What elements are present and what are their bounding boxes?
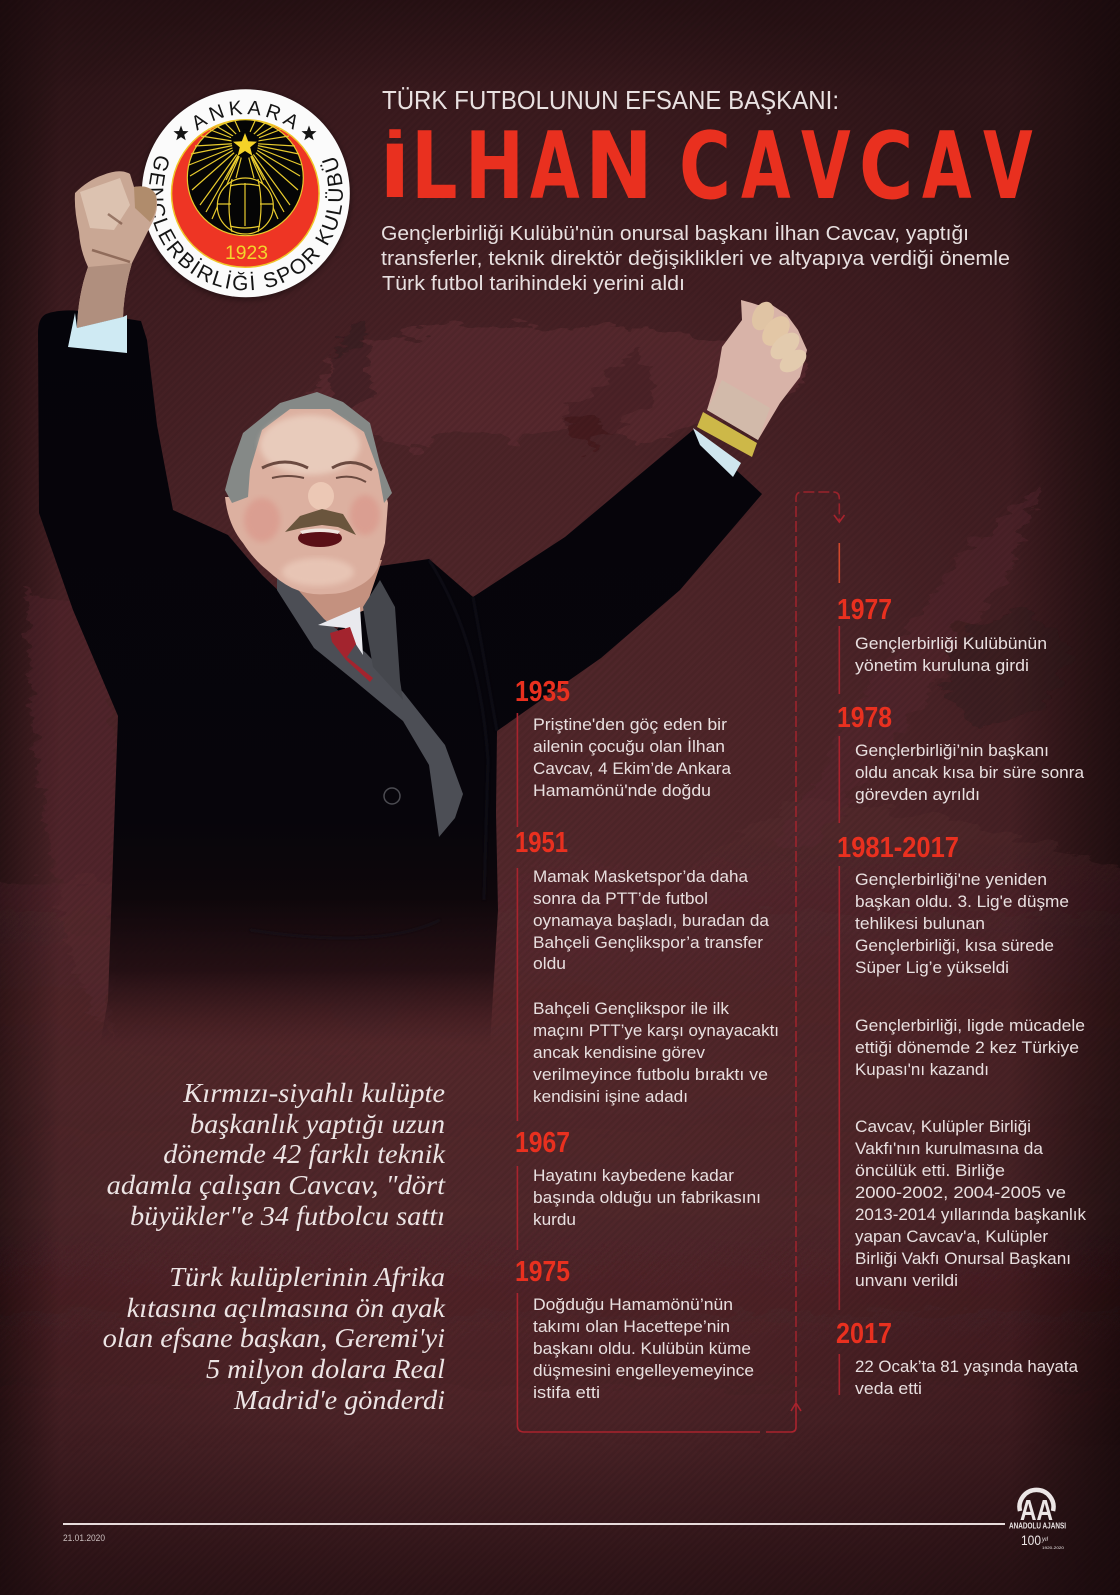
heading: kicker: TÜRK FUTBOLUNUN EFSANE BAŞKANI: (382, 85, 839, 115)
italic quote block 2: kıtasına açılmasına ön ayak (127, 1293, 446, 1323)
timeline entry: 1935: ailenin çocuğu olan İlhan (533, 737, 725, 756)
timeline entry: 1977: yönetim kuruluna girdi (855, 656, 1029, 675)
Anadolu Ajansı logo: 1920-2020 (1042, 1546, 1064, 1550)
timeline entry: 1978 (837, 702, 1085, 804)
timeline entry: 1975: istifa etti (533, 1383, 600, 1402)
timeline entry: 1951: kendisini işine adadı (533, 1087, 688, 1106)
photo: left shirt cuff (68, 313, 127, 353)
main title: A (741, 112, 790, 220)
timeline entry: 1978: görevden ayrıldı (855, 785, 980, 804)
timeline entry: 1981-2017: Gençlerbirliği, ligde mücadele (855, 1016, 1085, 1035)
timeline entry: 1951: Bahçeli Gençlikspor’a transfer (533, 933, 763, 952)
photo: neck (262, 560, 382, 628)
photo: right shirt cuff (693, 428, 741, 477)
italic quote block 2: 5 milyon dolara Real (206, 1354, 445, 1384)
main title: N (584, 112, 652, 220)
main title (379, 112, 1032, 220)
timeline entry: 1978: Gençlerbirliği’nin başkanı (855, 741, 1049, 760)
timeline entry: 1981-2017: ettiği dönemde 2 kez Türkiye (855, 1038, 1079, 1057)
intro paragraph: Türk futbol tarihindeki yerini aldı (382, 273, 685, 295)
footer date: 21.01.2020 (63, 1533, 105, 1544)
timeline entry: 1981-2017: Vakfı'nın kurulmasına da (855, 1139, 1044, 1158)
timeline entry: 1951: sonra da PTT’de futbol (533, 889, 708, 908)
intro paragraph: Gençlerbirliği Kulübü'nün onursal başkanı İlhan Cavcav, yaptığı (381, 222, 969, 245)
italic quote block 2: Madrid'e gönderdi (233, 1385, 445, 1415)
photo: Ilhan Cavcav with raised arms (38, 171, 810, 1045)
timeline entry: 1981-2017: yapan Cavcav'a, Kulüpler (855, 1227, 1048, 1246)
timeline entry: 1951: oynamaya başladı, buradan da (533, 911, 770, 930)
Anadolu Ajansı logo: 100 (1021, 1532, 1041, 1548)
timeline entry: 1981-2017: Süper Lig’e yükseldi (855, 958, 1009, 977)
photo: mouth (298, 529, 342, 547)
timeline entry: 1981-2017: başkan oldu. 3. Lig'e düşme (855, 892, 1069, 911)
timeline entry: 1935: Priştine'den göç eden bir (533, 715, 727, 734)
timeline entry: 2017: 2017 (836, 1318, 892, 1350)
timeline entry: 2017 (836, 1318, 1079, 1398)
timeline entry: 1975: düşmesini engelleyemeyince (533, 1361, 754, 1380)
timeline connector lines (517, 492, 844, 1432)
Anadolu Ajansı logo (1009, 1490, 1066, 1550)
photo: right fist (707, 298, 810, 440)
italic quote block 1: adamla çalışan Cavcav, "dört (107, 1170, 447, 1200)
timeline entry: 1967: 1967 (515, 1127, 570, 1159)
photo: coat (38, 310, 762, 1045)
italic quote block 2 (103, 1262, 446, 1415)
timeline entry: 1977 (837, 594, 1047, 675)
timeline entry: 1981-2017: Gençlerbirliği'ne yeniden (855, 870, 1047, 889)
brush strokes texture (0, 322, 1120, 1500)
timeline entry: 1981-2017: 2000-2002, 2004-2005 ve (855, 1183, 1066, 1202)
timeline entry: 1935 (515, 676, 732, 800)
timeline entry: 1975: 1975 (515, 1256, 570, 1288)
logo: top arc text: ANKARA (194, 100, 296, 131)
timeline entry: 1981-2017 (837, 832, 1086, 1290)
Anadolu Ajansı logo: AA (1020, 1495, 1053, 1527)
timeline entry: 1951: Mamak Masketspor’da daha (533, 867, 749, 886)
timeline entry: 1981-2017: 1981-2017 (837, 832, 959, 864)
Anadolu Ajansı logo: ANADOLU AJANSI (1009, 1522, 1066, 1530)
main title: C (859, 112, 913, 220)
timeline entry: 2017: 22 Ocak’ta 81 yaşında hayata (855, 1357, 1079, 1376)
timeline entry: 1951: maçını PTT’ye karşı oynayacaktı (533, 1021, 779, 1040)
main title: V (801, 112, 850, 220)
timeline entry: 1967: Hayatını kaybedene kadar (533, 1166, 734, 1185)
main title: V (983, 112, 1032, 220)
main title: L (411, 112, 458, 220)
photo: left fist (75, 171, 157, 328)
timeline entry: 1951: Bahçeli Gençlikspor ile ilk (533, 999, 730, 1018)
photo: gold watch (697, 412, 757, 457)
Anadolu Ajansı logo: yıl (1041, 1537, 1049, 1543)
photo: moustache (285, 509, 356, 535)
timeline entry: 1951: ancak kendisine görev (533, 1043, 705, 1062)
main title: A (530, 112, 579, 220)
timeline entry: 1951: 1951 (515, 827, 568, 859)
italic quote block 1: başkanlık yaptığı uzun (190, 1109, 445, 1139)
timeline entry: 1978: oldu ancak kısa bir süre sonra (855, 763, 1085, 782)
timeline entry: 1981-2017: 2013-2014 yıllarında başkanlık (855, 1205, 1086, 1224)
timeline entry: 1981-2017: öncülük etti. Birliğe (855, 1161, 1005, 1180)
timeline entry: 1977: 1977 (837, 594, 892, 626)
timeline entry: 1975 (515, 1256, 754, 1402)
logo: Gençlerbirliği badge (140, 89, 352, 301)
main title: İ (379, 130, 411, 215)
logo star (231, 129, 259, 160)
timeline entry: 1981-2017: tehlikesi bulunan (855, 914, 985, 933)
photo: coat button (384, 788, 400, 804)
photo: head (225, 392, 392, 594)
timeline entry: 1967: kurdu (533, 1210, 576, 1229)
photo: scarf (277, 566, 463, 837)
timeline entry: 1935: 1935 (515, 676, 570, 708)
timeline entry: 1981-2017: unvanı verildi (855, 1271, 958, 1290)
main title: A (922, 112, 971, 220)
italic quote block 2: Türk kulüplerinin Afrika (169, 1262, 445, 1292)
intro paragraph (381, 222, 1010, 295)
intro paragraph: transferler, teknik direktör değişiklikleri ve altyapıya verdiği önemle (381, 248, 1010, 270)
footer rule (63, 1523, 1005, 1525)
timeline entry: 1978: 1978 (837, 702, 892, 734)
timeline entry: 1951: oldu (533, 954, 566, 973)
italic quote block 1 (107, 1078, 447, 1231)
timeline entry: 1967 (515, 1127, 761, 1229)
timeline entry: 1935: Cavcav, 4 Ekim’de Ankara (533, 759, 732, 778)
italic quote block 1: dönemde 42 farklı teknik (163, 1139, 446, 1169)
logo football (217, 178, 273, 234)
timeline entry: 2017: veda etti (855, 1379, 922, 1398)
logo stars (174, 126, 316, 140)
italic quote block 2: olan efsane başkan, Geremi'yi (103, 1323, 445, 1353)
logo year: 1923 (225, 243, 268, 264)
logo: bottom arc text: GENÇLERBİRLİĞİ SPOR KULÜBÜ (149, 156, 343, 290)
italic quote block 1: Kırmızı-siyahlı kulüpte (182, 1078, 445, 1108)
main title: H (464, 112, 523, 220)
timeline entry: 1975: takımı olan Hacettepe’nin (533, 1317, 730, 1336)
timeline entry: 1981-2017: Gençlerbirliği, kısa sürede (855, 936, 1054, 955)
timeline entry: 1977: Gençlerbirliği Kulübünün (855, 634, 1047, 653)
timeline entry: 1981-2017: Cavcav, Kulüpler Birliği (855, 1117, 1031, 1136)
timeline entry: 1975: başkanı oldu. Kulübün küme (533, 1339, 751, 1358)
timeline entry: 1975: Doğduğu Hamamönü’nün (533, 1295, 733, 1314)
timeline entry: 1981-2017: Birliği Vakfı Onursal Başkanı (855, 1249, 1071, 1268)
logo rays (189, 121, 301, 219)
timeline entry: 1981-2017: Kupası'nı kazandı (855, 1060, 989, 1079)
main title: C (679, 112, 731, 220)
photo: shirt and tie (318, 607, 373, 682)
photo: coat folds (250, 560, 497, 938)
timeline entry: 1951 (515, 827, 779, 1106)
timeline entry: 1951: verilmeyince futbolu bıraktı ve (533, 1065, 768, 1084)
italic quote block 1: büyükler"e 34 futbolcu sattı (130, 1201, 445, 1231)
photo: eyes and brows (262, 462, 372, 482)
timeline entry: 1935: Hamamönü'nde doğdu (533, 781, 711, 800)
timeline entry: 1967: başında olduğu un fabrikasını (533, 1188, 761, 1207)
